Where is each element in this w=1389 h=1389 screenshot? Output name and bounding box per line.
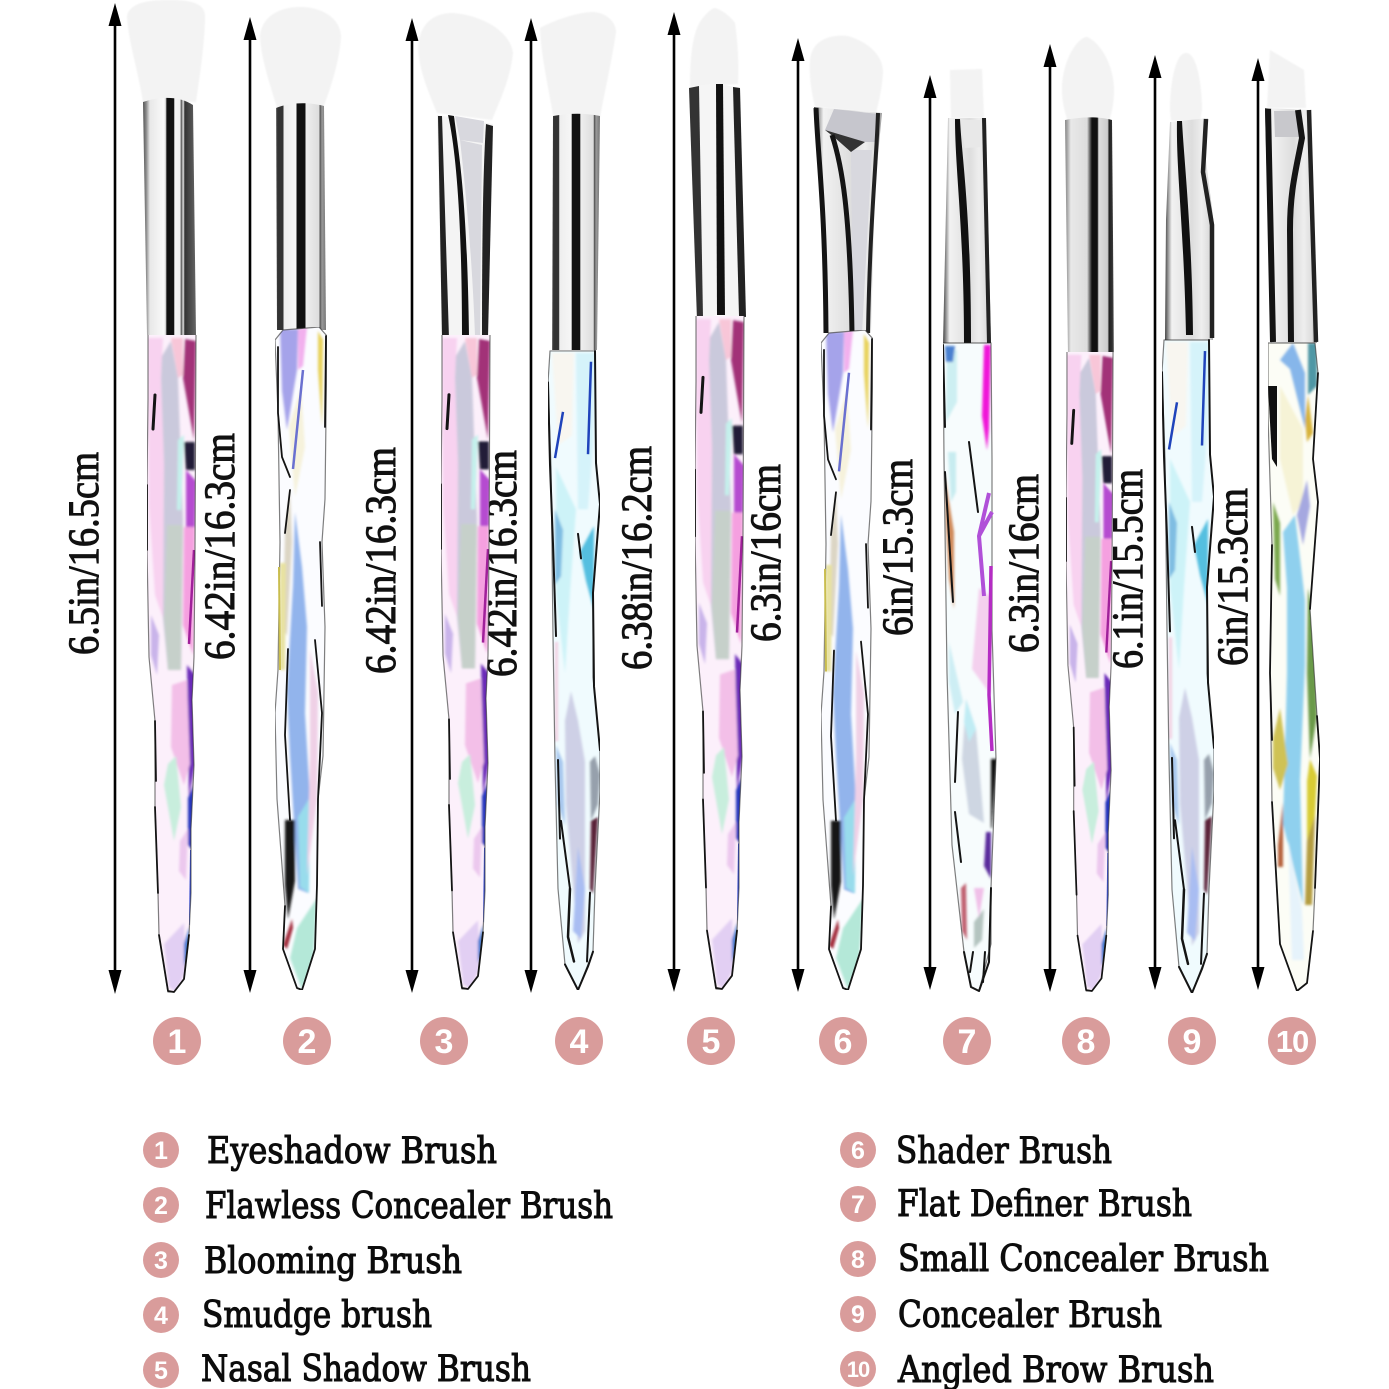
ferrule <box>143 98 196 335</box>
arrow: brush 3 length <box>406 18 418 993</box>
item 9: 9 <box>851 1301 865 1329</box>
badge 9 <box>1168 1017 1216 1065</box>
label: brush 6: 6.3in/16cm <box>743 464 790 642</box>
ferrule right stripe <box>868 113 878 333</box>
handle <box>275 327 327 990</box>
brush 10: angled brow <box>1265 50 1320 991</box>
brush 7: flat definer <box>943 69 997 992</box>
legend: left column <box>143 1131 613 1389</box>
handle <box>695 316 745 990</box>
brush 4: smudge <box>540 12 616 990</box>
ferrule <box>437 115 493 338</box>
ferrule <box>943 118 991 345</box>
item 8: Small Concealer Brush <box>898 1239 1269 1280</box>
arrow: brush 9 length <box>1148 55 1162 990</box>
item 2: Flawless Concealer Brush <box>205 1186 613 1227</box>
brush 9: concealer <box>1162 53 1214 993</box>
handle <box>943 342 997 992</box>
bristles <box>260 7 341 108</box>
bristles <box>418 13 513 120</box>
badge 10: 10 <box>1276 1024 1308 1059</box>
ferrule <box>552 114 600 350</box>
brush 2: flawless concealer <box>260 7 341 990</box>
badge 8: 8 <box>1077 1023 1095 1061</box>
label: brush 7: 6in/15.3cm <box>875 459 922 636</box>
arrow: brush 7 length <box>924 75 936 990</box>
ferrule right stripe <box>482 124 493 337</box>
badge 2: 2 <box>298 1023 316 1061</box>
handle <box>821 330 873 990</box>
badge 3: 3 <box>435 1023 453 1061</box>
ferrule right band <box>733 87 746 317</box>
dimension labels <box>61 433 1257 677</box>
ferrule black stripe <box>1177 121 1193 335</box>
badge 2 <box>283 1017 331 1065</box>
item 4: 4 <box>154 1302 168 1330</box>
ferrule <box>1165 118 1214 340</box>
ferrule panel <box>825 109 878 142</box>
number badges under brushes <box>153 1017 1316 1065</box>
bristles <box>690 8 738 87</box>
label: brush 8: 6.3in/16cm <box>1001 474 1048 653</box>
badge 8 <box>1062 1017 1110 1065</box>
ferrule panel <box>455 116 484 336</box>
ferrule <box>814 107 882 333</box>
ferrule <box>1265 108 1317 343</box>
badge 4: 4 <box>570 1023 589 1061</box>
item 1: 1 <box>154 1137 168 1165</box>
item 3: Blooming Brush <box>204 1241 462 1282</box>
handle <box>1066 352 1114 992</box>
bristles <box>127 0 205 102</box>
badge 7 <box>943 1017 991 1065</box>
handle <box>548 347 600 990</box>
ferrule right stripe <box>984 118 989 343</box>
bristles <box>1170 53 1202 121</box>
item 7: 7 <box>851 1191 865 1219</box>
ferrule right stripe <box>1309 110 1316 342</box>
item 1: Eyeshadow Brush <box>207 1131 497 1172</box>
badge 9: 9 <box>1183 1023 1201 1061</box>
arrow: brush 5 length <box>668 12 680 992</box>
bristles <box>540 12 616 117</box>
item 2: 2 <box>154 1192 168 1220</box>
arrow: brush 4 length <box>524 18 538 993</box>
badge 4 <box>555 1017 603 1065</box>
label: brush 1: 6.5in/16.5cm <box>61 452 108 655</box>
arrow: brush 6 length <box>792 38 804 992</box>
item 9: Concealer Brush <box>898 1295 1162 1336</box>
item 7: Flat Definer Brush <box>897 1184 1192 1225</box>
label: brush 3: 6.42in/16.3cm <box>358 447 405 674</box>
item 5: Nasal Shadow Brush <box>201 1349 531 1389</box>
ferrule <box>1065 117 1114 356</box>
ferrule left band <box>689 86 703 320</box>
arrow: brush 10 length <box>1252 58 1264 990</box>
bristles <box>1062 37 1114 122</box>
ferrule black stripe <box>716 84 725 315</box>
badge 1 <box>153 1017 201 1065</box>
bristles <box>810 36 883 113</box>
arrow: brush 1 length <box>108 3 122 994</box>
ferrule black stripe <box>448 115 469 337</box>
badge 6: 6 <box>834 1023 852 1061</box>
ferrule stripes <box>1268 109 1302 342</box>
item 6: 6 <box>851 1137 865 1165</box>
brush 8: small concealer <box>1062 37 1114 992</box>
item 6: Shader Brush <box>896 1131 1112 1172</box>
ferrule dark wedge <box>825 130 865 152</box>
brush 6: shader <box>810 36 883 990</box>
item 3: 3 <box>154 1247 168 1275</box>
item 10: 10 <box>847 1357 870 1382</box>
ferrule stripes <box>438 116 449 338</box>
brush 5: nasal shadow <box>689 8 746 990</box>
brush 1: eyeshadow <box>127 0 205 993</box>
badge 5: 5 <box>702 1023 720 1061</box>
badge 6 <box>819 1017 867 1065</box>
handle <box>1162 336 1214 993</box>
label: brush 10: 6in/15.3cm <box>1210 488 1257 666</box>
brush 3: blooming <box>418 13 513 990</box>
item 4: Smudge brush <box>202 1295 432 1336</box>
badge 10 <box>1268 1017 1316 1065</box>
dimension arrows <box>108 3 1264 994</box>
brushes <box>127 0 1320 993</box>
label: brush 9: 6.1in/15.5cm <box>1105 469 1152 669</box>
ferrule right stripe <box>1203 119 1212 338</box>
bristles <box>1267 50 1306 108</box>
ferrule <box>689 83 746 320</box>
item 8: 8 <box>851 1246 865 1274</box>
badge 5 <box>687 1017 735 1065</box>
ferrule stripes <box>816 108 852 333</box>
legend: right column <box>840 1131 1269 1389</box>
label: brush 4: 6.42in/16.3cm <box>479 450 526 677</box>
badge 7: 7 <box>958 1023 976 1061</box>
ferrule <box>276 103 326 330</box>
bristles <box>950 69 984 118</box>
label: brush 2: 6.42in/16.3cm <box>197 433 244 660</box>
label: brush 5: 6.38in/16.2cm <box>614 446 661 670</box>
handle <box>441 335 491 990</box>
item 5: 5 <box>154 1357 168 1385</box>
ferrule black stripe <box>955 119 971 343</box>
ferrule top square <box>960 120 983 148</box>
badge 3 <box>420 1017 468 1065</box>
badge 1: 1 <box>168 1023 186 1061</box>
ferrule top patch <box>1274 111 1301 137</box>
ferrule lower panel <box>851 150 872 333</box>
arrow: brush 8 length <box>1044 44 1056 992</box>
handle <box>1268 340 1320 991</box>
handle <box>147 335 197 993</box>
arrow: brush 2 length <box>244 17 256 993</box>
